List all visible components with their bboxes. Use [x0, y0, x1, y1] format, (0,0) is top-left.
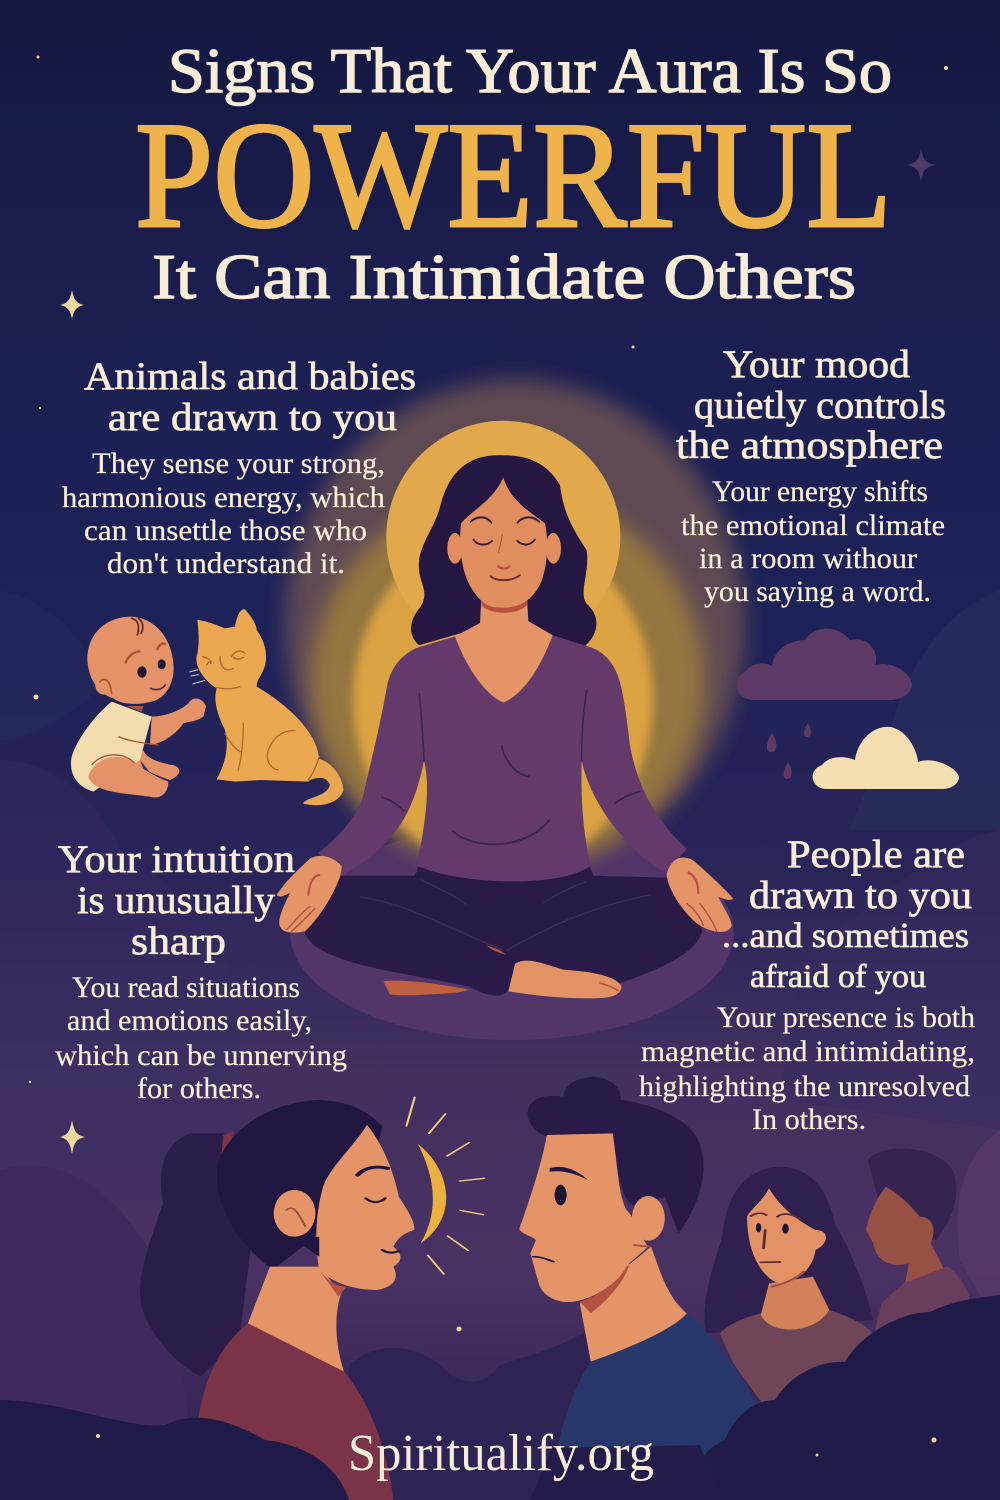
body text: can unsettle those who: [84, 514, 367, 547]
body text: [639, 1001, 975, 1136]
lotus disk: [290, 826, 734, 1040]
weather clouds: [736, 629, 959, 789]
legs: [305, 866, 702, 995]
storm cloud: [736, 629, 912, 700]
body text: [62, 447, 385, 580]
man in profile: [519, 1077, 761, 1500]
heading: afraid of you: [750, 959, 926, 995]
aura glow: [285, 380, 745, 870]
ears: [447, 533, 463, 564]
title: Signs That Your Aura Is So: [168, 35, 892, 106]
sparkle: [906, 148, 936, 182]
hands: [277, 856, 342, 933]
heading: is unusually: [77, 879, 276, 922]
feet: [383, 981, 470, 995]
panel: people drawn: [639, 833, 975, 1136]
body text: don't understand it.: [107, 547, 345, 580]
body text: Your presence is both: [717, 1001, 975, 1034]
heading: People are: [787, 833, 965, 876]
foreground clouds: [0, 1295, 1000, 1500]
body text: [681, 475, 945, 608]
panel: intuition: [55, 838, 347, 1105]
body text: In others.: [752, 1103, 866, 1136]
body text: which can be unnerving: [55, 1039, 347, 1072]
neck and chest: [455, 592, 553, 703]
hair: [411, 455, 596, 646]
sparkle: [60, 1120, 85, 1154]
title: It Can Intimidate Others: [152, 241, 856, 312]
torso and arms: [318, 635, 687, 882]
background clouds: [0, 590, 1000, 1500]
onlooker woman: [704, 1167, 876, 1417]
body text: and emotions easily,: [67, 1004, 312, 1037]
body text: you saying a word.: [704, 575, 931, 608]
body text: Your energy shifts: [712, 475, 928, 508]
panel: mood: [676, 343, 946, 608]
onlooker man: [865, 1148, 971, 1370]
heading: are drawn to you: [108, 396, 397, 439]
heading: quietly controls: [694, 384, 946, 427]
heading: sharp: [131, 920, 226, 963]
clothing folds: [382, 690, 640, 844]
crescent moon and rays: [406, 1097, 484, 1274]
heading: [676, 343, 946, 467]
body text: the emotional climate: [681, 509, 945, 542]
woman in profile: [140, 1100, 414, 1500]
sparkle: [60, 290, 84, 319]
body text: You read situations: [72, 971, 300, 1004]
heading: Your mood: [723, 343, 911, 386]
heading: [722, 833, 972, 995]
body text: in a room withour: [699, 542, 917, 575]
heading: [84, 355, 416, 439]
face: [460, 477, 547, 608]
halo: [386, 421, 620, 653]
meditating woman: [277, 421, 733, 998]
heading: drawn to you: [749, 874, 972, 917]
body text: [55, 971, 347, 1105]
facial features: [471, 517, 539, 580]
footer: site name: Spiritualify.org: [348, 1425, 654, 1482]
body text: highlighting the unresolved: [639, 1070, 970, 1103]
cat: [189, 609, 343, 805]
body text: They sense your strong,: [92, 447, 385, 480]
heading: the atmosphere: [676, 424, 943, 467]
bright cloud: [813, 727, 959, 789]
heading: Your intuition: [58, 838, 295, 881]
baby: [71, 617, 206, 798]
title: POWERFUL: [135, 91, 892, 259]
heading: [58, 838, 295, 963]
body text: harmonious energy, which: [62, 481, 385, 514]
heading: Animals and babies: [84, 355, 416, 398]
heading: ...and sometimes: [722, 916, 969, 955]
panel: animals and babies: [62, 355, 416, 580]
body text: for others.: [137, 1072, 261, 1105]
rain drops: [767, 723, 811, 779]
body text: magnetic and intimidating,: [641, 1035, 975, 1068]
couple and onlookers: [140, 1077, 971, 1500]
title: [135, 35, 892, 312]
baby and cat: [71, 609, 343, 805]
